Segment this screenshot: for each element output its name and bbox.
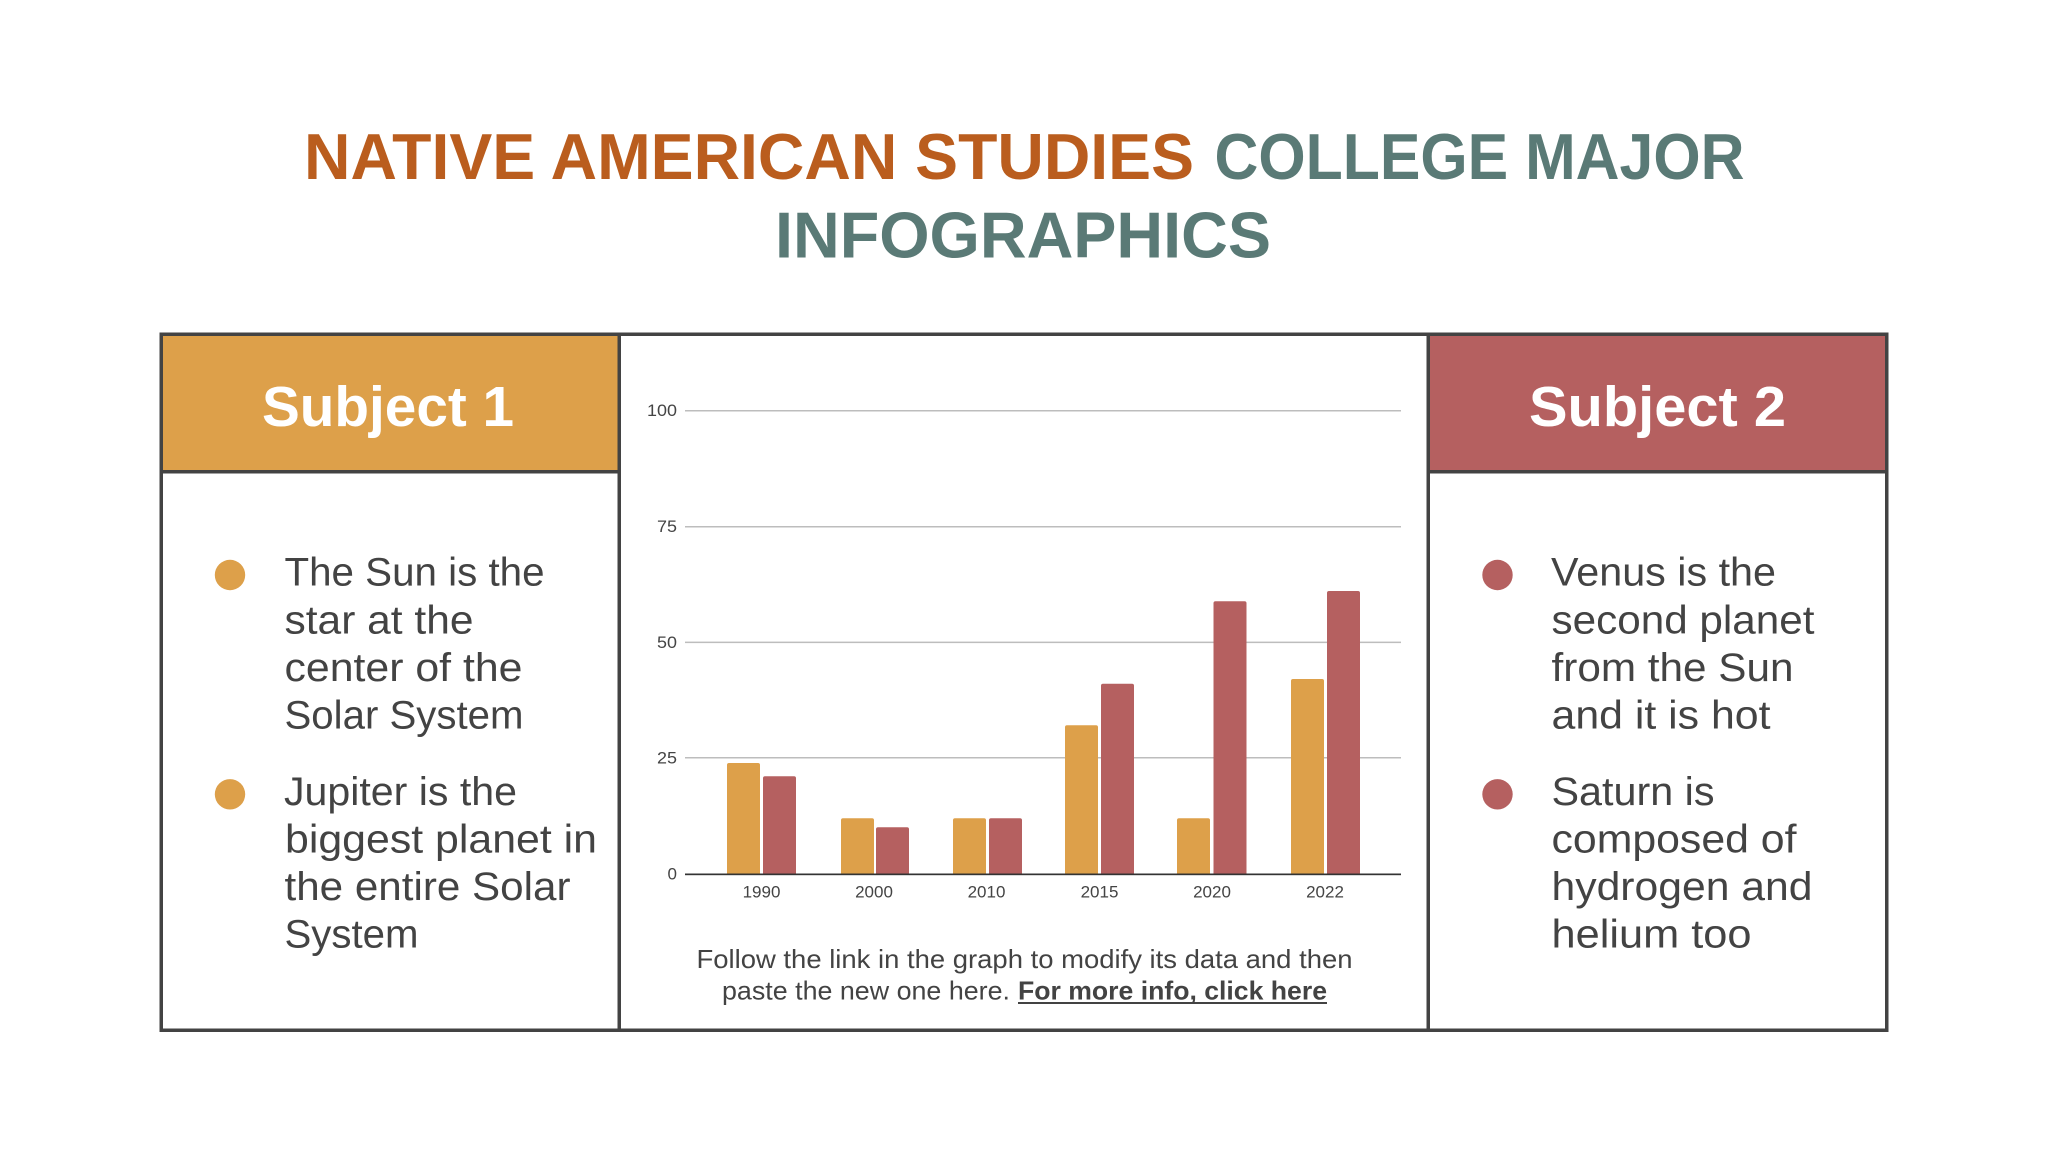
bar chart bbox=[647, 401, 1401, 902]
title: COLLEGE MAJOR bbox=[1214, 120, 1744, 193]
bullet list: subject 1: Solar System bbox=[284, 694, 524, 738]
subject 2 header bbox=[1428, 334, 1887, 472]
subject 2 header: Subject 2 bbox=[1529, 375, 1786, 439]
x axis labels: 2000 bbox=[855, 882, 893, 902]
panel frame bbox=[160, 332, 1888, 1032]
x axis labels: 2010 bbox=[968, 882, 1005, 902]
x axis labels: 2020 bbox=[1193, 882, 1231, 902]
panel: subject 2 bbox=[1428, 334, 1887, 957]
x axis labels: 1990 bbox=[743, 882, 780, 902]
y axis labels: 75 bbox=[657, 517, 677, 536]
bullet list: subject 2 bbox=[1482, 550, 1814, 957]
bullet list: subject 1: System bbox=[284, 913, 418, 957]
bullet list: subject 2: Saturn is bbox=[1552, 770, 1714, 814]
panel: subject 1 bbox=[161, 334, 618, 957]
title bbox=[304, 120, 1744, 272]
y axis labels: 25 bbox=[657, 748, 677, 768]
caption: For more info, click here bbox=[1018, 975, 1327, 1005]
bullet list: subject 1: The Sun is the bbox=[284, 550, 544, 594]
title: NATIVE AMERICAN STUDIES bbox=[304, 120, 1194, 193]
bullet list: subject 1: the entire Solar bbox=[284, 865, 570, 909]
y axis labels: 100 bbox=[647, 401, 677, 420]
caption bbox=[696, 944, 1352, 1005]
caption: Follow the link in the graph to modify its data and then bbox=[696, 944, 1352, 974]
bullet list: subject 2: hydrogen and bbox=[1552, 865, 1812, 909]
bullet list: subject 1: Jupiter is the bbox=[284, 770, 517, 814]
bullet list: subject 1: biggest planet in bbox=[285, 818, 597, 862]
title: INFOGRAPHICS bbox=[775, 198, 1271, 272]
subject 1 header bbox=[161, 334, 618, 472]
caption: paste the new one here. bbox=[722, 975, 1010, 1005]
x axis labels: 2015 bbox=[1081, 882, 1118, 902]
bullet list: subject 2: second planet bbox=[1552, 598, 1814, 642]
subject 1 header: Subject 1 bbox=[262, 375, 514, 439]
bullet list: subject 1: center of the bbox=[284, 646, 522, 690]
x axis line bbox=[685, 874, 1401, 875]
bullet list: subject 2: from the Sun bbox=[1552, 646, 1794, 690]
x axis labels: 2022 bbox=[1306, 882, 1344, 902]
y axis labels bbox=[647, 401, 677, 884]
bars: subject 1 bbox=[727, 679, 1324, 875]
bullet list: subject 1: star at the bbox=[284, 598, 474, 642]
bullet list: subject 2: composed of bbox=[1552, 818, 1797, 862]
y axis labels: 50 bbox=[657, 633, 677, 652]
gridlines bbox=[685, 410, 1401, 758]
y axis labels: 0 bbox=[668, 864, 677, 884]
bars: subject 2 bbox=[763, 591, 1360, 875]
x axis labels bbox=[743, 882, 1344, 902]
bullet list: subject 1 bbox=[215, 550, 597, 957]
bullet list: subject 2: helium too bbox=[1552, 913, 1752, 957]
bullet list: subject 2: Venus is the bbox=[1551, 550, 1776, 594]
bullet list: subject 2: and it is hot bbox=[1552, 694, 1770, 738]
